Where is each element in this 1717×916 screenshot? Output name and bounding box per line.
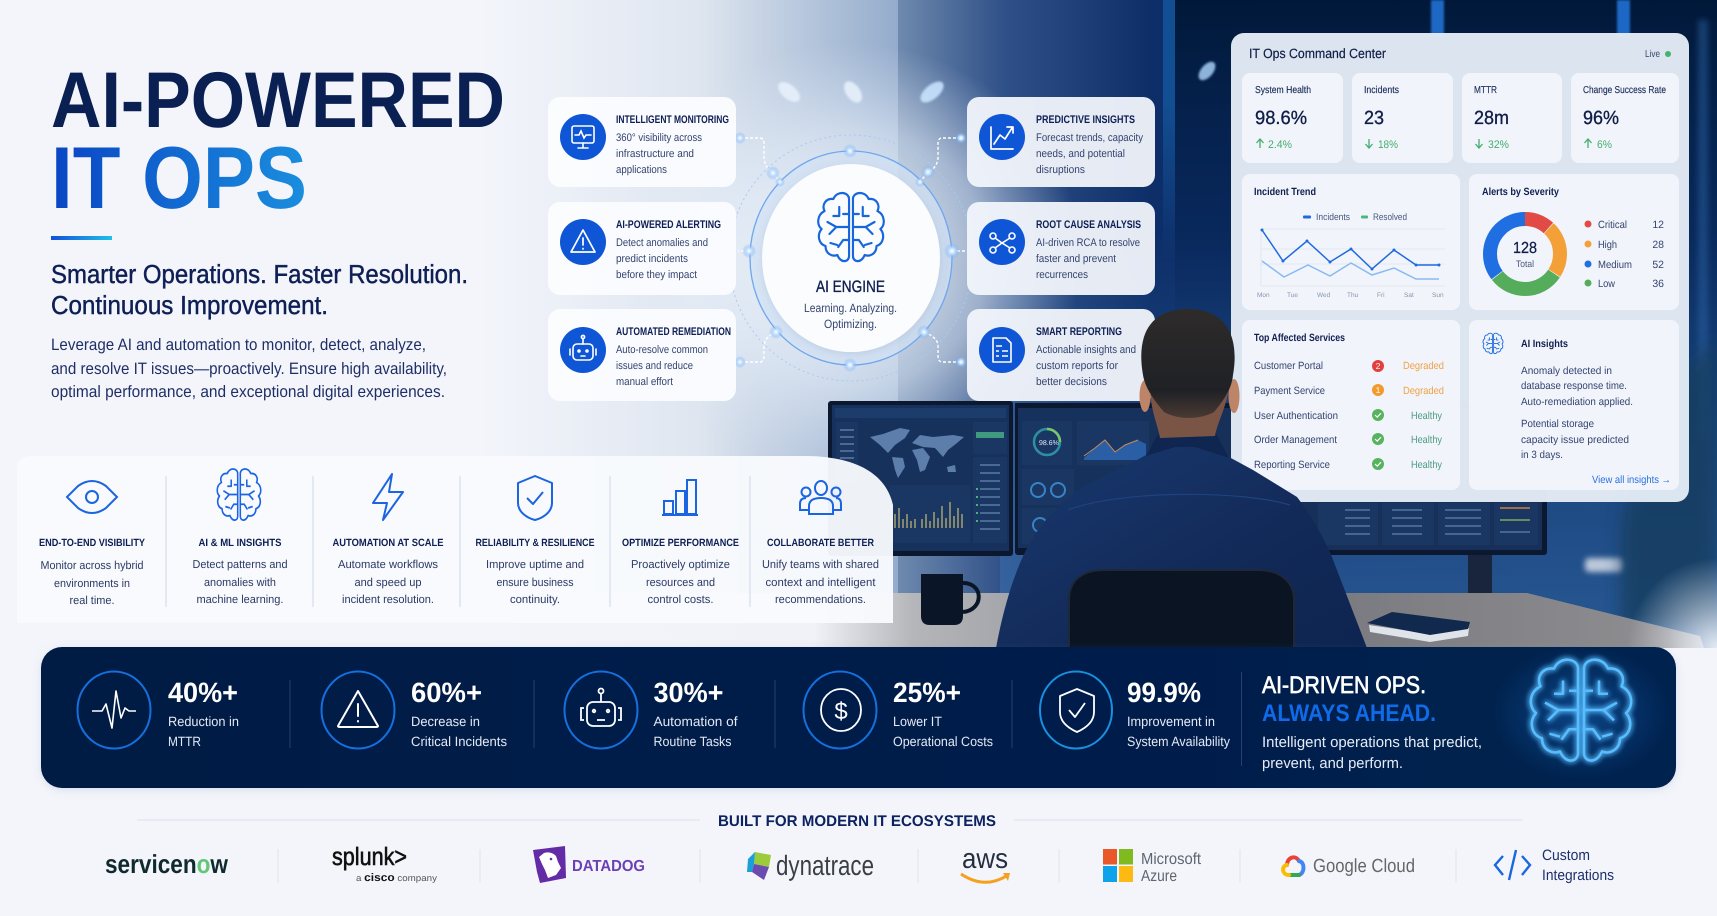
tagline: Intelligent operations that predict, bbox=[1262, 734, 1482, 751]
card: automated remediation: Auto-resolve common bbox=[616, 344, 708, 356]
KPI: incidents: 23 bbox=[1364, 108, 1384, 129]
table: top affected services: Top Affected Services bbox=[1254, 332, 1345, 344]
table: top affected services: Degraded bbox=[1403, 360, 1444, 372]
feature: AI and ML insights: AI & ML INSIGHTS bbox=[198, 537, 282, 549]
metric: costs: Operational Costs bbox=[893, 734, 993, 749]
logo: dynatrace bbox=[747, 850, 874, 881]
card: intelligent monitoring bbox=[548, 97, 736, 187]
card: intelligent monitoring: applications bbox=[616, 164, 667, 176]
feature: AI and ML insights: anomalies with bbox=[204, 577, 276, 589]
card: automated remediation: AUTOMATED REMEDIATION bbox=[616, 326, 731, 338]
metric: MTTR bbox=[78, 672, 239, 749]
engine connectors bbox=[738, 138, 966, 362]
intro paragraph: Leverage AI and automation to monitor, detect, analyze, bbox=[51, 336, 426, 354]
KPI: system health: 98.6% bbox=[1255, 108, 1307, 129]
subtitle: Smarter Operations. Faster Resolution. bbox=[51, 259, 468, 289]
feature: reliability: RELIABILITY & RESILIENCE bbox=[476, 537, 594, 549]
logo: custom integrations: Custom bbox=[1542, 847, 1590, 864]
icon: neon brain bbox=[1491, 645, 1671, 781]
metric: MTTR: MTTR bbox=[168, 734, 201, 749]
logo: dynatrace: dynatrace bbox=[776, 850, 874, 881]
feature: AI and ML insights bbox=[192, 469, 288, 606]
subtitle: Continuous Improvement. bbox=[51, 290, 328, 320]
chart: incident trend: Incidents bbox=[1316, 212, 1350, 223]
panel: IT Ops Command Center dashboard: IT Ops Command Center bbox=[1249, 46, 1386, 61]
panel: AI insights: Auto-remediation applied. bbox=[1521, 396, 1633, 408]
chart: alerts by severity donut: 28 bbox=[1652, 239, 1664, 251]
feature: performance: control costs. bbox=[648, 594, 714, 606]
engine label: Learning. Analyzing. bbox=[804, 301, 897, 315]
metric: costs: 25%+ bbox=[893, 677, 961, 708]
chart: alerts by severity donut: 128 bbox=[1513, 240, 1537, 257]
KPI: change success rate: Change Success Rate bbox=[1583, 85, 1666, 96]
metric: availability: 99.9% bbox=[1127, 677, 1201, 708]
chart: alerts by severity donut: Alerts by Severity bbox=[1482, 186, 1559, 198]
panel: feature strip bbox=[17, 456, 893, 623]
KPI: system health: System Health bbox=[1255, 85, 1311, 96]
card: smart reporting: Actionable insights and bbox=[1036, 344, 1136, 356]
card: AI-powered alerting: before they impact bbox=[616, 269, 697, 281]
partner separators bbox=[278, 849, 1456, 883]
chart: incident trend bbox=[1242, 174, 1460, 310]
desk bbox=[480, 593, 1704, 648]
chart: incident trend: Mon bbox=[1257, 292, 1270, 299]
panel: capability cards bbox=[548, 97, 1155, 401]
monitor left bbox=[828, 401, 1013, 556]
chart: incident trend: Thu bbox=[1347, 292, 1359, 299]
metric: automation: Routine Tasks bbox=[654, 734, 732, 749]
metric: availability: Improvement in bbox=[1127, 714, 1215, 729]
logo: splunk: a cisco company bbox=[356, 872, 438, 884]
icon: AI brain bbox=[818, 193, 884, 261]
card: root cause analysis: AI-driven RCA to resolve bbox=[1036, 237, 1140, 249]
card: AI-powered alerting: AI-POWERED ALERTING bbox=[616, 219, 721, 231]
chart: alerts by severity donut: 52 bbox=[1652, 259, 1664, 271]
table: top affected services: Healthy bbox=[1411, 459, 1443, 471]
monitor right bbox=[1015, 403, 1150, 551]
title accent bar bbox=[51, 236, 112, 240]
chart: alerts by severity donut: 36 bbox=[1652, 278, 1664, 290]
chart: incident trend: Tue bbox=[1287, 292, 1298, 299]
feature: reliability: ensure business bbox=[496, 577, 574, 589]
card: root cause analysis bbox=[967, 202, 1155, 295]
card: automated remediation bbox=[548, 309, 736, 401]
icon: report document bbox=[993, 338, 1011, 362]
feature: collaboration: recommendations. bbox=[775, 594, 866, 606]
chart: alerts by severity donut: 12 bbox=[1652, 219, 1664, 231]
metric: automation: Automation of bbox=[654, 714, 738, 729]
KPI: system health: 2.4% bbox=[1268, 139, 1292, 151]
card: predictive insights: Forecast trends, capacity bbox=[1036, 132, 1143, 144]
table: top affected services: 2 bbox=[1376, 361, 1381, 371]
card: automated remediation: manual effort bbox=[616, 376, 673, 388]
intro paragraph: optimal performance, and exceptional digital experiences. bbox=[51, 383, 445, 401]
metric: critical incidents: 60%+ bbox=[411, 677, 482, 708]
logo: datadog: DATADOG bbox=[572, 858, 645, 875]
feature: performance bbox=[622, 480, 739, 606]
card: automated remediation: issues and reduce bbox=[616, 360, 693, 372]
title: AI-POWERED bbox=[51, 55, 505, 144]
card: predictive insights bbox=[967, 97, 1155, 187]
logo: microsoft azure: Microsoft bbox=[1141, 851, 1202, 868]
icon: trend chart bbox=[991, 127, 1013, 149]
logo: google cloud: Google Cloud bbox=[1313, 856, 1415, 877]
intro paragraph: and resolve IT issues—proactively. Ensure high availability, bbox=[51, 360, 447, 378]
chart: alerts by severity donut: Low bbox=[1598, 278, 1615, 290]
logo: microsoft azure: Azure bbox=[1141, 868, 1177, 885]
table: top affected services bbox=[1242, 320, 1460, 490]
panel: AI insights: Anomaly detected in bbox=[1521, 365, 1612, 377]
metric: costs: $ bbox=[834, 698, 848, 725]
metric: critical incidents: Critical Incidents bbox=[411, 734, 507, 749]
title bbox=[51, 55, 505, 227]
table: top affected services: Order Management bbox=[1254, 434, 1337, 446]
feature: reliability: continuity. bbox=[510, 594, 560, 606]
card: AI-powered alerting: Detect anomalies and bbox=[616, 237, 708, 249]
metric: costs: Lower IT bbox=[893, 714, 942, 729]
panel: AI insights: AI Insights bbox=[1521, 338, 1568, 350]
icon: small brain bbox=[1483, 333, 1503, 354]
card: root cause analysis: ROOT CAUSE ANALYSIS bbox=[1036, 219, 1141, 231]
logo: splunk bbox=[332, 843, 438, 884]
coffee mug bbox=[921, 574, 979, 625]
card: smart reporting: SMART REPORTING bbox=[1036, 326, 1122, 338]
engine label bbox=[804, 278, 897, 331]
subtitle bbox=[51, 259, 468, 320]
KPI: change success rate: 6% bbox=[1597, 139, 1612, 151]
table: top affected services: Reporting Service bbox=[1254, 459, 1330, 471]
office chair bbox=[1069, 570, 1294, 648]
card: root cause analysis: recurrences bbox=[1036, 269, 1088, 281]
metric: MTTR: 40%+ bbox=[168, 677, 238, 708]
feature: collaboration bbox=[762, 481, 879, 606]
logo: custom integrations: Integrations bbox=[1542, 867, 1614, 884]
intro paragraph bbox=[51, 336, 447, 401]
KPI: system health bbox=[1242, 73, 1343, 163]
metric: availability bbox=[1040, 672, 1230, 749]
card: intelligent monitoring: 360° visibility across bbox=[616, 132, 702, 144]
table: top affected services: Healthy bbox=[1411, 434, 1443, 446]
card: smart reporting: better decisions bbox=[1036, 376, 1107, 388]
feature: automation: incident resolution. bbox=[342, 594, 434, 606]
KPI: incidents bbox=[1352, 73, 1453, 163]
title: IT OPS bbox=[51, 128, 307, 227]
chart: alerts by severity donut bbox=[1469, 174, 1679, 310]
monitors bbox=[828, 401, 1547, 608]
card: smart reporting: custom reports for bbox=[1036, 360, 1118, 372]
card: predictive insights: PREDICTIVE INSIGHTS bbox=[1036, 114, 1135, 126]
chart: incident trend: Resolved bbox=[1373, 212, 1407, 223]
logo: splunk: splunk> bbox=[332, 843, 407, 871]
feature: collaboration: COLLABORATE BETTER bbox=[767, 537, 874, 549]
tagline: ALWAYS AHEAD. bbox=[1262, 700, 1436, 727]
logo: custom integrations bbox=[1495, 847, 1614, 884]
icon: network nodes bbox=[990, 233, 1015, 253]
KPI: change success rate: 96% bbox=[1583, 108, 1619, 129]
metric: MTTR: Reduction in bbox=[168, 714, 239, 729]
feature: reliability: Improve uptime and bbox=[486, 559, 584, 571]
KPI: change success rate bbox=[1571, 73, 1679, 163]
KPI: MTTR: MTTR bbox=[1474, 85, 1497, 96]
card: predictive insights: disruptions bbox=[1036, 164, 1085, 176]
logo: servicenow: servicenow bbox=[105, 849, 229, 879]
chart: incident trend: Fri bbox=[1377, 292, 1385, 299]
feature: visibility: Monitor across hybrid bbox=[40, 560, 144, 572]
KPI: MTTR bbox=[1462, 73, 1562, 163]
table: top affected services: Customer Portal bbox=[1254, 360, 1323, 372]
panel: AI insights: capacity issue predicted bbox=[1521, 434, 1629, 446]
table: top affected services: 1 bbox=[1376, 385, 1381, 395]
KPI: incidents: Incidents bbox=[1364, 85, 1399, 96]
chart: incident trend: Sun bbox=[1432, 292, 1444, 299]
feature: AI and ML insights: machine learning. bbox=[196, 594, 284, 606]
icon: warning bbox=[571, 230, 595, 252]
metric: costs bbox=[804, 672, 993, 749]
KPI: MTTR: 32% bbox=[1488, 139, 1509, 151]
table: top affected services: Degraded bbox=[1403, 385, 1444, 397]
feature: visibility: environments in bbox=[54, 578, 130, 590]
logo: datadog bbox=[533, 846, 645, 883]
metric: availability: System Availability bbox=[1127, 734, 1230, 749]
logo: microsoft azure bbox=[1103, 849, 1202, 885]
tagline bbox=[1262, 672, 1482, 772]
tagline: prevent, and perform. bbox=[1262, 755, 1403, 772]
chart: alerts by severity donut: Critical bbox=[1598, 219, 1627, 231]
engine label: AI ENGINE bbox=[816, 278, 885, 296]
panel: AI engine hub bbox=[729, 132, 973, 381]
glow nodes bbox=[734, 132, 967, 372]
panel: AI insights: View all insights → bbox=[1592, 474, 1671, 486]
chart: incident trend: Wed bbox=[1317, 292, 1331, 299]
panel: AI insights bbox=[1469, 320, 1679, 490]
person at desk bbox=[996, 309, 1367, 648]
panel: AI insights: in 3 days. bbox=[1521, 449, 1563, 461]
table: top affected services: User Authentication bbox=[1254, 410, 1338, 422]
card: AI-powered alerting: predict incidents bbox=[616, 253, 688, 265]
feature: visibility: real time. bbox=[70, 595, 114, 607]
feature: performance: Proactively optimize bbox=[631, 559, 730, 571]
monitor lower rows bbox=[1318, 503, 1538, 545]
chart: incident trend: Incident Trend bbox=[1254, 186, 1316, 198]
chart: incident trend: Sat bbox=[1404, 292, 1414, 299]
metric: critical incidents bbox=[322, 672, 507, 749]
card: predictive insights: needs, and potential bbox=[1036, 148, 1125, 160]
card: smart reporting bbox=[967, 309, 1155, 401]
panel: AI insights: database response time. bbox=[1521, 380, 1627, 392]
panel: IT Ops Command Center dashboard bbox=[1231, 33, 1689, 502]
feature: performance: resources and bbox=[646, 577, 715, 589]
feature: automation: Automate workflows bbox=[338, 559, 438, 571]
panel: IT Ops Command Center dashboard: Live bbox=[1645, 49, 1660, 60]
feature: collaboration: Unify teams with shared bbox=[762, 559, 879, 571]
metric: automation: 30%+ bbox=[654, 677, 724, 708]
icon: robot bbox=[570, 335, 596, 360]
table: top affected services: Payment Service bbox=[1254, 385, 1325, 397]
engine label: Optimizing. bbox=[824, 317, 877, 331]
panel: metrics bar bbox=[41, 645, 1676, 788]
panel: AI insights: Potential storage bbox=[1521, 418, 1594, 430]
section heading: ecosystems: BUILT FOR MODERN IT ECOSYSTEMS bbox=[718, 813, 996, 830]
feature: collaboration: context and intelligent bbox=[766, 577, 876, 589]
chart: alerts by severity donut: High bbox=[1598, 239, 1617, 251]
monitor right: 98.6% bbox=[1039, 440, 1059, 447]
feature: AI and ML insights: Detect patterns and bbox=[192, 559, 288, 571]
feature: automation: AUTOMATION AT SCALE bbox=[332, 537, 444, 549]
chart: alerts by severity donut: Medium bbox=[1598, 259, 1632, 271]
KPI: incidents: 18% bbox=[1378, 139, 1398, 151]
metric: automation bbox=[564, 672, 738, 749]
logo: google cloud bbox=[1283, 856, 1415, 877]
metric: critical incidents: Decrease in bbox=[411, 714, 480, 729]
KPI: MTTR: 28m bbox=[1474, 108, 1509, 129]
feature: automation: and speed up bbox=[354, 577, 422, 589]
card: intelligent monitoring: INTELLIGENT MONITORING bbox=[616, 114, 729, 126]
feature: visibility: END-TO-END VISIBILITY bbox=[39, 537, 145, 549]
notebook bbox=[1367, 612, 1470, 642]
card: root cause analysis: faster and prevent bbox=[1036, 253, 1116, 265]
feature: performance: OPTIMIZE PERFORMANCE bbox=[622, 537, 739, 549]
feature: reliability bbox=[476, 476, 594, 606]
feature: automation bbox=[332, 474, 444, 606]
card: intelligent monitoring: infrastructure and bbox=[616, 148, 694, 160]
table: top affected services: Healthy bbox=[1411, 410, 1443, 422]
feature: visibility bbox=[39, 481, 145, 607]
tagline: AI-DRIVEN OPS. bbox=[1262, 672, 1426, 699]
logo: aws: aws bbox=[962, 843, 1008, 874]
chart: alerts by severity donut: Total bbox=[1516, 259, 1534, 270]
icon: monitor pulse bbox=[572, 126, 594, 148]
card: AI-powered alerting bbox=[548, 202, 736, 295]
